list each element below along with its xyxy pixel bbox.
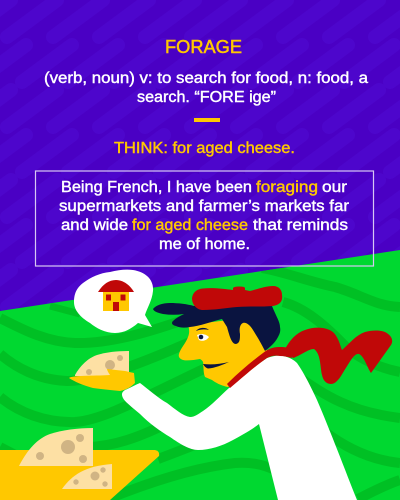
character: forager [69, 286, 392, 500]
story text box: and wide [61, 217, 128, 234]
green field background [0, 250, 400, 500]
hair [153, 303, 280, 351]
icon: house [98, 280, 134, 311]
story text box: foraging [256, 179, 318, 196]
story text box: supermarkets and farmer’s markets far [59, 198, 349, 215]
hand [69, 369, 135, 391]
story text box: that reminds [253, 217, 348, 234]
think line: THINK: for aged cheese. [114, 140, 295, 157]
eye and brow [196, 328, 209, 341]
beret [192, 286, 282, 310]
story text box: me of home. [159, 236, 250, 253]
large cheese wedge [19, 428, 93, 466]
cheese in hand [75, 351, 129, 376]
title: FORAGE [165, 37, 242, 57]
thought bubble with house [74, 270, 153, 333]
story text box: Being French, I have been [61, 179, 252, 196]
coat: torso and arm [122, 356, 357, 500]
scarf at neck [227, 347, 292, 388]
small cheese wedge [62, 464, 112, 489]
definition text: search. “FORE ige” [137, 89, 276, 106]
story text box [36, 171, 374, 266]
divider bar [194, 118, 220, 122]
face [179, 318, 268, 387]
definition text: (verb, noun) v: to search for food, n: food, a [44, 70, 368, 87]
definition text [44, 70, 368, 106]
table [0, 450, 159, 500]
scarf tail [285, 328, 392, 384]
story text box: our [322, 179, 347, 196]
mouth [203, 362, 229, 368]
story text box: for aged cheese [132, 217, 248, 234]
